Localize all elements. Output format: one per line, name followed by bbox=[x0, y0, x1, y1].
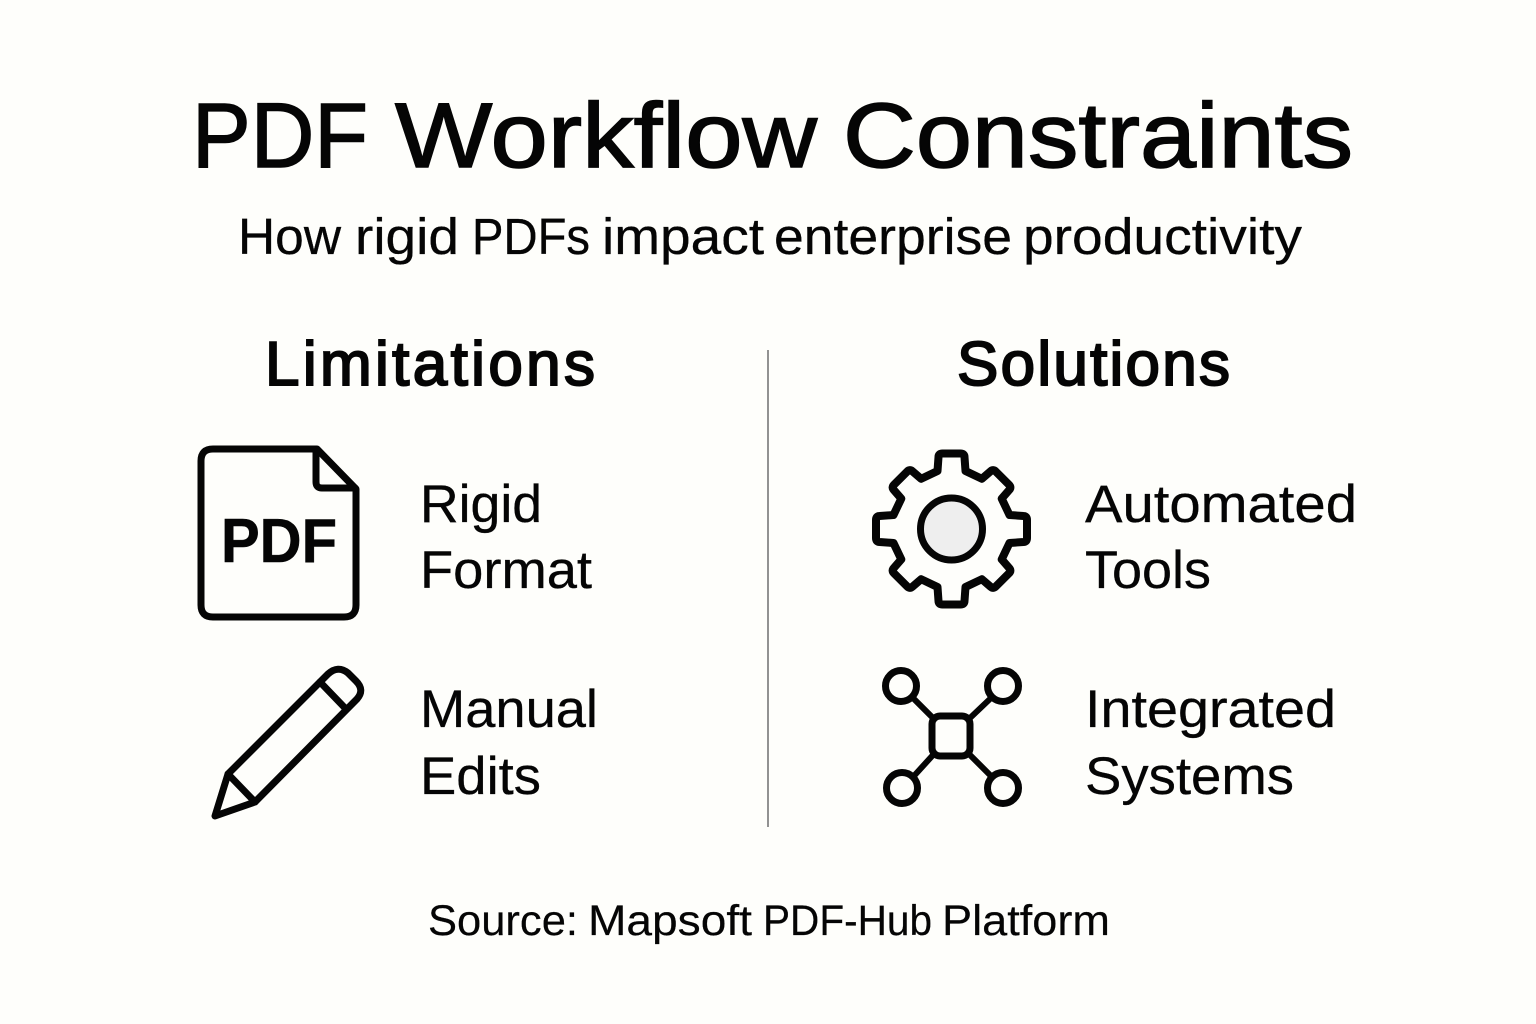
panel: solutions bbox=[876, 330, 1357, 806]
source note: PDF-Hub bbox=[763, 897, 932, 945]
title: Constraints bbox=[843, 85, 1353, 187]
item: manual edits bbox=[420, 680, 598, 806]
item: rigid format: Format bbox=[420, 541, 592, 600]
subtitle: impact bbox=[602, 208, 764, 265]
title bbox=[192, 85, 1353, 187]
heading: limitations: Limitations bbox=[265, 330, 595, 399]
title: Workflow bbox=[395, 85, 818, 187]
item: integrated systems: Systems bbox=[1085, 747, 1294, 806]
item: automated tools bbox=[1085, 475, 1357, 600]
item: rigid format bbox=[420, 475, 592, 600]
source note bbox=[428, 897, 1110, 945]
subtitle: PDFs bbox=[472, 208, 590, 265]
panel: limitations bbox=[201, 330, 598, 816]
item: integrated systems: Integrated bbox=[1085, 680, 1336, 739]
source note: Platform bbox=[942, 897, 1110, 945]
source note: Mapsoft bbox=[588, 897, 752, 945]
item: automated tools: Tools bbox=[1085, 541, 1211, 600]
item: automated tools: Automated bbox=[1085, 475, 1357, 534]
icon: pdf document: PDF bbox=[221, 507, 337, 576]
icon: pdf document bbox=[201, 449, 356, 617]
icon: pencil bbox=[215, 669, 361, 816]
icon: gear bbox=[876, 454, 1027, 604]
icon: network bbox=[886, 670, 1018, 804]
item: integrated systems bbox=[1085, 680, 1336, 806]
item: rigid format: Rigid bbox=[420, 475, 542, 534]
item: manual edits: Manual bbox=[420, 680, 598, 739]
subtitle: productivity bbox=[1023, 208, 1303, 265]
subtitle: rigid bbox=[355, 208, 459, 265]
subtitle: How bbox=[238, 208, 341, 265]
title: PDF bbox=[192, 85, 368, 187]
subtitle bbox=[238, 208, 1303, 265]
subtitle: enterprise bbox=[774, 208, 1012, 265]
source note: Source: bbox=[428, 897, 578, 945]
item: manual edits: Edits bbox=[420, 747, 541, 806]
heading: solutions: Solutions bbox=[957, 330, 1230, 399]
